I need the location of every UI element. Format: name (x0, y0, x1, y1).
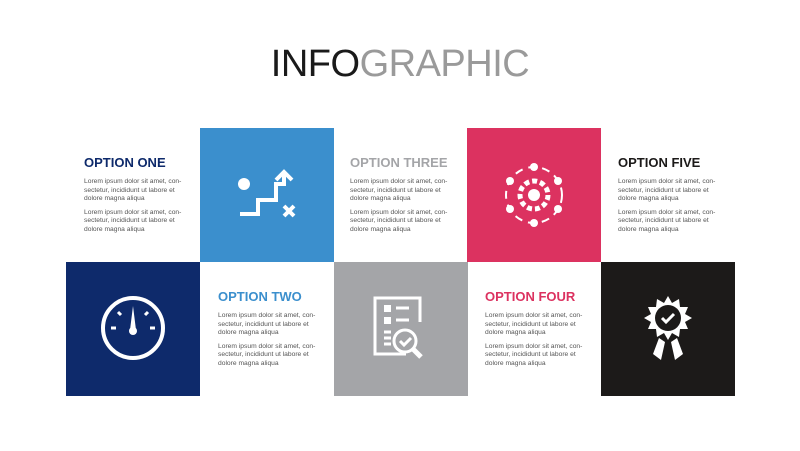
panel: option three text (350, 155, 448, 233)
panel: option two text: Lorem ipsum dolor sit amet, con-sectetur, incididunt ut labore et dolore magna aliqua (218, 312, 315, 336)
panel: option four text: Lorem ipsum dolor sit amet, con-sectetur, incididunt ut labore et dolore magna aliqua (485, 312, 582, 336)
panel: option one text (84, 155, 182, 233)
panel: option five text: Lorem ipsum dolor sit amet, con-sectetur, incididunt ut labore et dolore magna aliqua (618, 209, 715, 233)
panel: option three text: OPTION THREE (350, 155, 448, 170)
panel: option four text (485, 289, 582, 367)
panel: option five text: OPTION FIVE (618, 155, 700, 170)
panel: option four text: Lorem ipsum dolor sit amet, con-sectetur, incididunt ut labore et dolore magna aliqua (485, 343, 582, 367)
panel: option three text: Lorem ipsum dolor sit amet, con-sectetur, incididunt ut labore et dolore magna aliqua (350, 209, 447, 233)
icon: award badge (644, 296, 692, 360)
panel: blue square (200, 128, 334, 262)
panel: black square (601, 262, 735, 396)
panel: option five text (618, 155, 716, 233)
icon: gear network (505, 163, 563, 227)
panel: option five text: Lorem ipsum dolor sit amet, con-sectetur, incididunt ut labore et dolore magna aliqua (618, 178, 715, 202)
panel: option two text: Lorem ipsum dolor sit amet, con-sectetur, incididunt ut labore et dolore magna aliqua (218, 343, 315, 367)
panel: option one text: Lorem ipsum dolor sit amet, con-sectetur, incididunt ut labore et dolore magna aliqua (84, 178, 181, 202)
title: INFOGRAPHIC (271, 43, 529, 85)
icon: document search (374, 296, 423, 359)
icon: strategy steps (238, 169, 296, 218)
icon: gauge (101, 296, 165, 360)
panel: red square (467, 128, 601, 262)
panel: option three text: Lorem ipsum dolor sit amet, con-sectetur, incididunt ut labore et dolore magna aliqua (350, 178, 447, 202)
panel: navy square (66, 262, 200, 396)
panel: option two text (218, 289, 316, 367)
panel: option one text: OPTION ONE (84, 155, 166, 170)
panel: option four text: OPTION FOUR (485, 289, 575, 304)
panel: option two text: OPTION TWO (218, 289, 302, 304)
panel: gray square (334, 262, 468, 396)
panel: option one text: Lorem ipsum dolor sit amet, con-sectetur, incididunt ut labore et dolore magna aliqua (84, 209, 181, 233)
